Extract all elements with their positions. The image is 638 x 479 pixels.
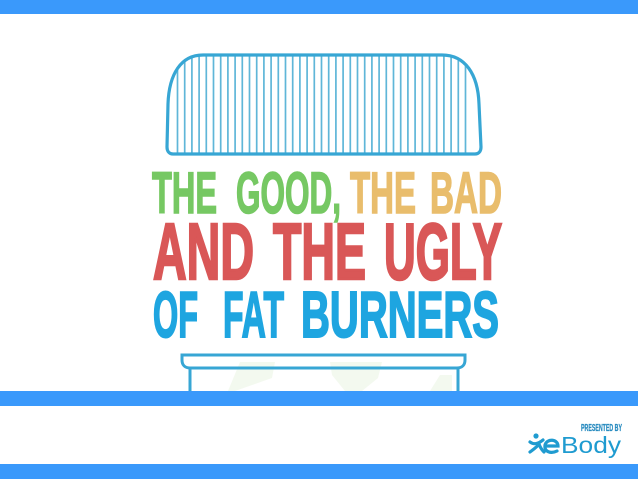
- title line 2: and the ugly: AND: [153, 207, 254, 296]
- faint green marks: [228, 362, 452, 391]
- brand name: Body: [561, 432, 622, 458]
- icon: figure: [530, 433, 558, 452]
- title: [152, 161, 502, 351]
- title line 3: of fat burners: BURNERS: [301, 278, 499, 351]
- icon: jar lid: [167, 55, 481, 154]
- title line 2: and the ugly: [153, 207, 502, 296]
- title line 3: of fat burners: OF: [153, 278, 198, 351]
- title line 1: the bad: THE: [350, 161, 416, 226]
- title line 2: and the ugly: THE: [273, 207, 366, 296]
- title line 3: of fat burners: FAT: [223, 278, 284, 351]
- top band: [0, 0, 638, 14]
- title line 3: of fat burners: [153, 278, 499, 351]
- logo: presented by eBody: [530, 422, 622, 458]
- icon: jar neck: [182, 355, 465, 392]
- title line 1: the good: [152, 161, 341, 226]
- title line 1: the bad: BAD: [430, 161, 502, 226]
- title line 1: the good: THE: [152, 161, 217, 226]
- title line 2: and the ugly: UGLY: [384, 207, 502, 296]
- title line 1: the good: GOOD,: [236, 161, 341, 226]
- bottom band: [0, 464, 638, 479]
- middle band: [0, 391, 638, 406]
